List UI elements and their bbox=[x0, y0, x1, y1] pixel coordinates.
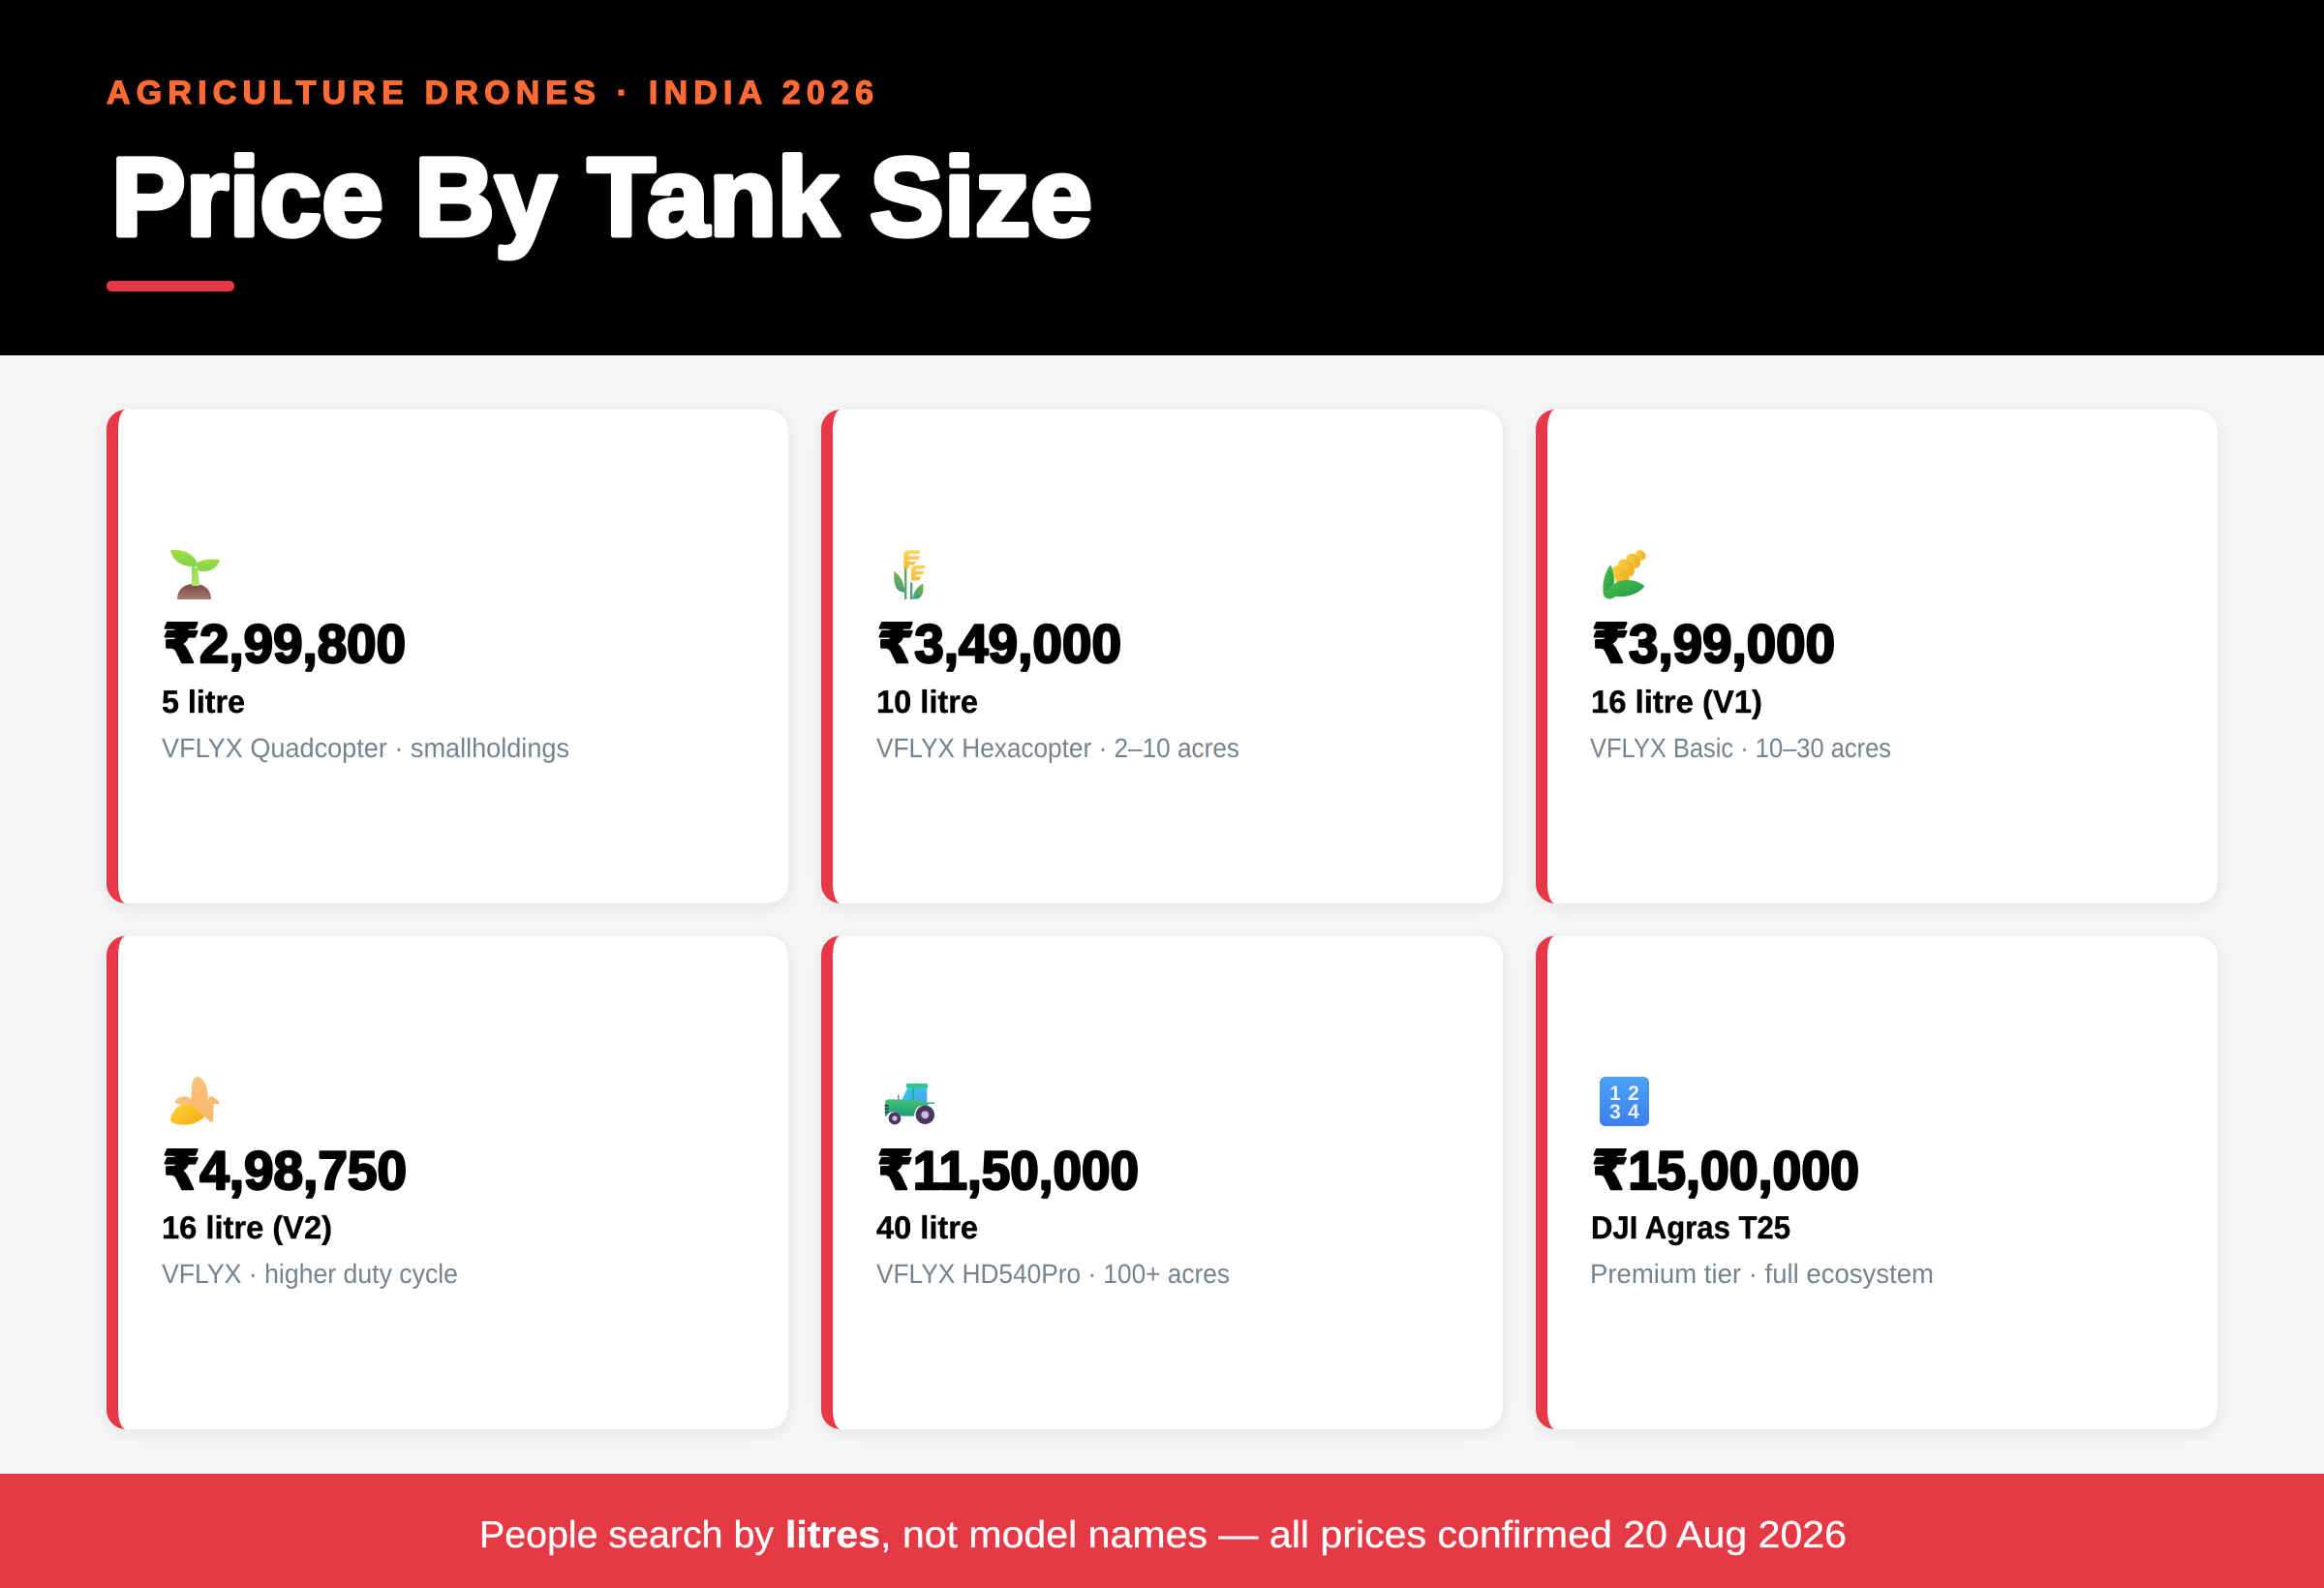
panel: card 10 litre bbox=[821, 410, 1503, 903]
title accent bar bbox=[107, 281, 234, 291]
tank size: DJI Agras T25 bbox=[1591, 1209, 1790, 1245]
panel: card DJI Agras T25 bbox=[1536, 935, 2217, 1429]
panel: card 40 litre bbox=[821, 935, 1503, 1429]
footer message: , not model names — all prices confirmed 20 Aug 2026 bbox=[880, 1514, 1847, 1556]
icon: number keycap: 2 bbox=[1628, 1083, 1639, 1105]
icon: tractor bbox=[885, 1084, 934, 1124]
panel: card 16 litre V2 bbox=[107, 935, 788, 1429]
price: ₹3,99,000 bbox=[1592, 613, 1835, 674]
icon: number keycap: 1 bbox=[1609, 1083, 1621, 1105]
tank size: 40 litre bbox=[876, 1209, 978, 1245]
description: VFLYX HD540Pro · 100+ acres bbox=[876, 1259, 1230, 1289]
panel: card 16 litre V1 bbox=[1536, 410, 2217, 903]
icon: rice plant bbox=[894, 550, 926, 599]
panel: card 5 litre bbox=[107, 410, 788, 903]
description: VFLYX · higher duty cycle bbox=[162, 1259, 458, 1289]
tank size: 10 litre bbox=[876, 684, 978, 719]
price: ₹11,50,000 bbox=[877, 1140, 1139, 1201]
icon: banana bbox=[170, 1077, 220, 1125]
description: VFLYX Quadcopter · smallholdings bbox=[162, 733, 569, 763]
icon: ear of corn bbox=[1603, 548, 1648, 598]
description: VFLYX Hexacopter · 2–10 acres bbox=[876, 733, 1239, 763]
tank size: 5 litre bbox=[162, 684, 245, 719]
footer message bbox=[479, 1514, 1847, 1556]
price: ₹4,98,750 bbox=[163, 1140, 407, 1201]
description: Premium tier · full ecosystem bbox=[1590, 1259, 1934, 1289]
footer message: litres bbox=[785, 1514, 880, 1556]
eyebrow: AGRICULTURE DRONES · INDIA 2026 bbox=[107, 75, 873, 111]
tank size: 16 litre (V2) bbox=[162, 1209, 332, 1245]
title: Price By Tank Size bbox=[111, 136, 1092, 260]
icon: number keycap: 3 bbox=[1609, 1101, 1621, 1123]
footer message: People search by bbox=[479, 1514, 774, 1556]
price: ₹15,00,000 bbox=[1592, 1140, 1859, 1201]
icon: number keycap bbox=[1600, 1077, 1649, 1126]
footer banner bbox=[0, 1474, 2324, 1588]
description: VFLYX Basic · 10–30 acres bbox=[1590, 733, 1891, 763]
price: ₹3,49,000 bbox=[877, 613, 1121, 674]
icon: number keycap: 4 bbox=[1628, 1101, 1639, 1123]
icon: seedling bbox=[170, 550, 220, 599]
tank size: 16 litre (V1) bbox=[1591, 684, 1762, 719]
price: ₹2,99,800 bbox=[163, 613, 406, 674]
header band bbox=[0, 0, 2324, 355]
